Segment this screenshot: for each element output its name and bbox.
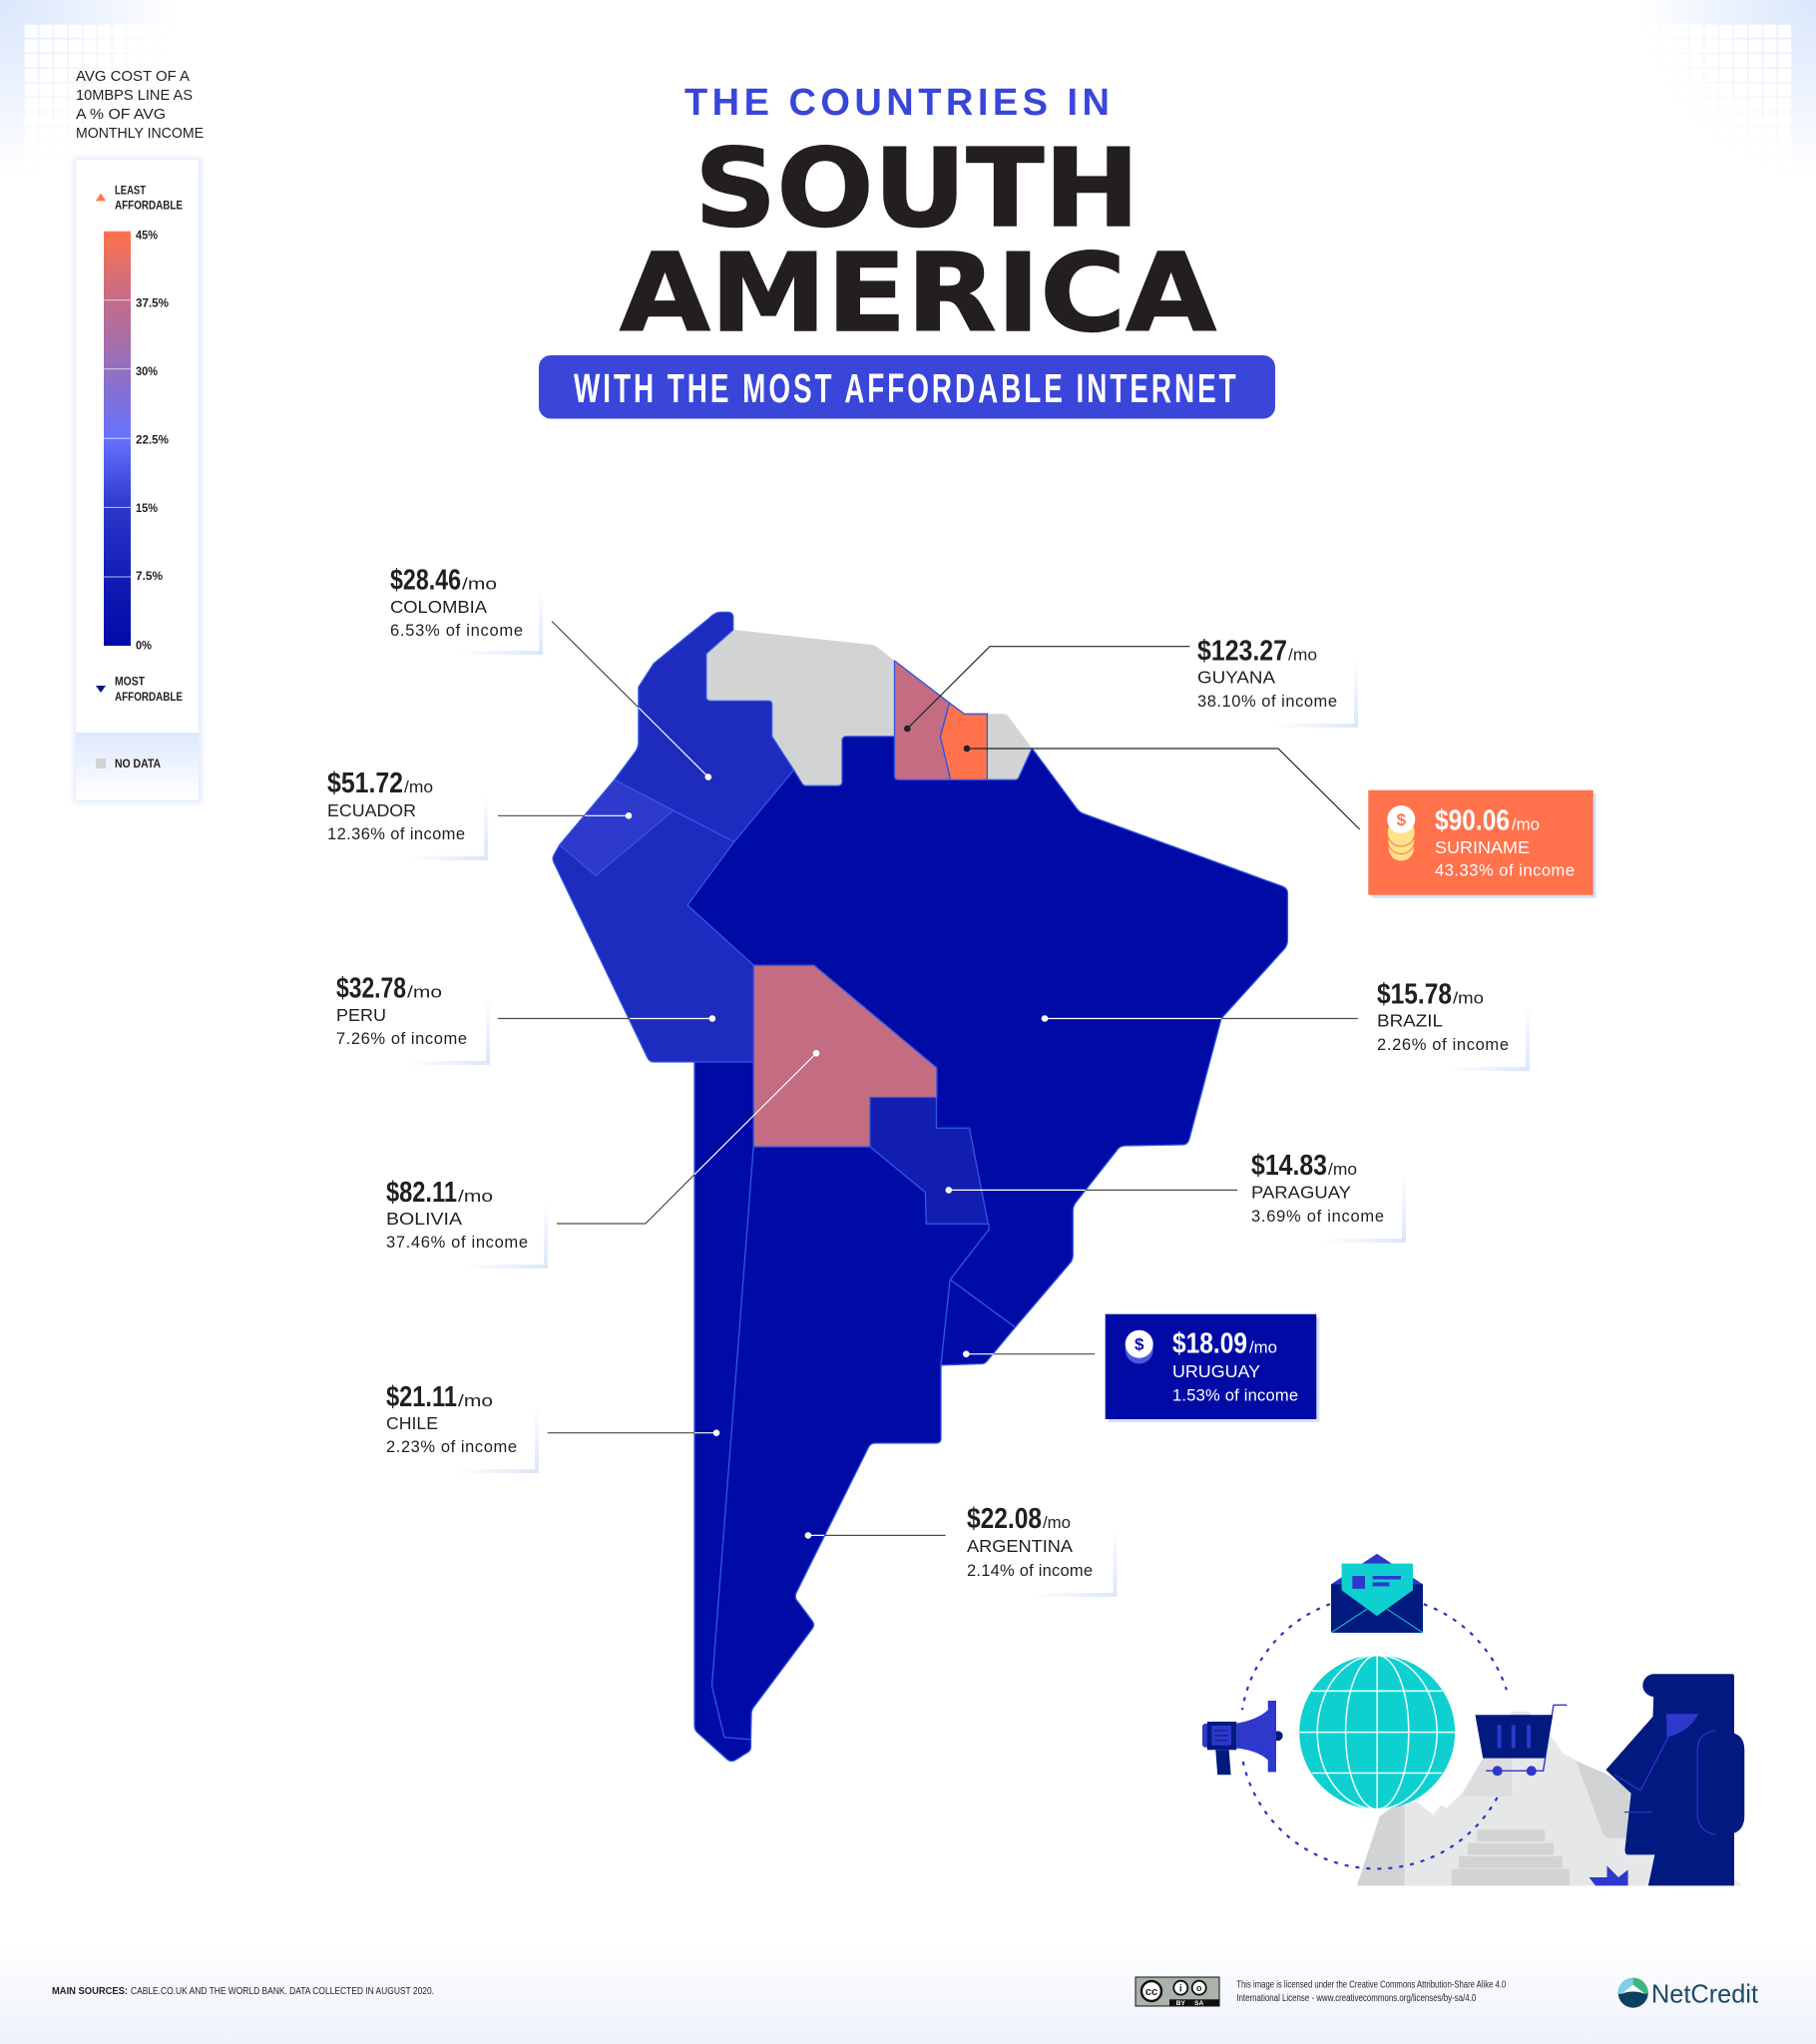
callout: Bolivia: $82.11 [386, 1177, 457, 1209]
Suriname [940, 703, 987, 779]
callout: Colombia [390, 565, 543, 655]
logo: NetCredit: NetCredit [1651, 1979, 1759, 2009]
callout: Brazil: BRAZIL [1377, 1011, 1443, 1031]
icon: creative commons badge: SA [1194, 2000, 1204, 2007]
subtitle: WITH THE MOST AFFORDABLE INTERNET [574, 366, 1236, 411]
callout: Peru [336, 972, 490, 1065]
callout: Peru: 7.26% of income [336, 1030, 467, 1048]
icon: globe [1299, 1655, 1455, 1809]
icon: creative commons badge: o [1196, 1983, 1202, 1993]
subtitle band [539, 355, 1275, 419]
callout: Argentina: ARGENTINA [967, 1536, 1073, 1556]
scale labels [136, 230, 169, 653]
Colombia [615, 612, 794, 841]
scale labels: 37.5% [136, 297, 169, 309]
callout: Colombia: 6.53% of income [390, 622, 523, 640]
callout: Uruguay (most affordable): $18.09 [1172, 1328, 1247, 1360]
Guyana [894, 661, 951, 779]
callout: Chile: $21.11 [386, 1381, 457, 1413]
callout: Bolivia [386, 1177, 548, 1269]
Bolivia [753, 965, 937, 1147]
callout: Peru: PERU [336, 1005, 386, 1025]
license text: This image is licensed under the Creative Commons Attribution-Share Alike 4.0 [1236, 1980, 1507, 1991]
icon: creative commons badge: i [1179, 1984, 1182, 1994]
callout: Bolivia: 37.46% of income [386, 1234, 528, 1252]
callout: Ecuador: ECUADOR [327, 800, 416, 820]
Argentina [712, 1147, 989, 1740]
least affordable label: AFFORDABLE [115, 201, 183, 213]
callout: Colombia: COLOMBIA [390, 597, 487, 617]
icon: coin: $ [1135, 1335, 1144, 1354]
background corner: top right [1636, 0, 1816, 180]
legend heading: MONTHLY INCOME [76, 126, 204, 142]
scale labels: 30% [136, 366, 158, 378]
callout: Chile: 2.23% of income [386, 1438, 517, 1456]
callout: Ecuador: 12.36% of income [327, 825, 465, 843]
Paraguay [870, 1098, 988, 1224]
most affordable label: MOST [115, 677, 145, 689]
Peru [553, 810, 753, 1062]
callout: Suriname (least affordable): /mo [1512, 814, 1540, 834]
callout: Guyana: $123.27 [1197, 635, 1287, 667]
icon: coin [1126, 1330, 1153, 1363]
least affordable label [115, 186, 183, 213]
icon: creative commons badge [1135, 1977, 1219, 2007]
Uruguay [941, 1279, 1015, 1365]
mountain [1357, 1712, 1742, 1885]
callout: Paraguay: PARAGUAY [1251, 1182, 1351, 1202]
panel: legend [74, 158, 202, 803]
callout: Chile: /mo [458, 1391, 493, 1410]
callout: Suriname (least affordable): SURINAME [1435, 837, 1530, 857]
callout: Guyana: /mo [1288, 645, 1317, 665]
scale labels: 7.5% [136, 571, 163, 583]
scale labels: 22.5% [136, 435, 169, 447]
callout: Guyana [1197, 635, 1358, 728]
least affordable label: LEAST [115, 186, 146, 198]
sources: CABLE.CO.UK AND THE WORLD BANK. DATA COLLECTED IN AUGUST 2020. [131, 1985, 434, 1997]
callout: Suriname (least affordable): $90.06 [1435, 804, 1510, 836]
icon: envelope [1331, 1554, 1423, 1633]
heading line 1: SOUTH [694, 127, 1139, 252]
callout: Chile: CHILE [386, 1413, 438, 1433]
icon: megaphone [1202, 1701, 1283, 1775]
callout: Argentina: /mo [1043, 1513, 1071, 1532]
no data label: NO DATA [115, 759, 161, 770]
callout: Uruguay (most affordable): /mo [1249, 1338, 1277, 1357]
heading line 2: AMERICA [620, 232, 1216, 356]
callout: Peru: /mo [407, 982, 442, 1001]
callout: Guyana: 38.10% of income [1197, 693, 1337, 711]
callout: Uruguay (most affordable): 1.53% of income [1172, 1386, 1298, 1404]
callout: Argentina: 2.14% of income [967, 1562, 1093, 1580]
legend heading: A % OF AVG [76, 107, 166, 123]
sources [52, 1985, 434, 1997]
scale labels: 15% [136, 503, 158, 515]
logo mark [1618, 1978, 1648, 2008]
leader dots [626, 726, 1048, 1539]
icon: crown plant [1589, 1865, 1628, 1885]
callout: Paraguay [1251, 1150, 1406, 1243]
callout: Bolivia: /mo [458, 1187, 493, 1206]
callout: Suriname (least affordable): 43.33% of income [1435, 861, 1575, 879]
license text [1236, 1980, 1507, 2004]
icon: creative commons badge: cc [1145, 1986, 1157, 1998]
most affordable label [115, 677, 183, 704]
Chile [694, 1062, 753, 1762]
callout: Peru: $32.78 [336, 972, 406, 1004]
leader lines [498, 621, 1360, 1535]
French Guiana (no data) [987, 714, 1032, 779]
callout: Brazil: 2.26% of income [1377, 1036, 1509, 1054]
callout: Brazil [1377, 978, 1530, 1071]
callout: Colombia: /mo [462, 575, 497, 593]
legend heading: 10MBPS LINE AS [76, 88, 193, 104]
callout: Brazil: $15.78 [1377, 978, 1452, 1010]
illustration: internet and Machu Picchu with moai [1202, 1554, 1744, 1885]
no data swatch [96, 759, 106, 768]
title block [539, 82, 1275, 419]
callout: Brazil: /mo [1453, 988, 1484, 1008]
scale labels: 0% [136, 641, 152, 653]
icon: most affordable arrow [96, 686, 106, 693]
callout: Bolivia: BOLIVIA [386, 1209, 462, 1229]
callout: Chile [386, 1381, 539, 1473]
callout: Colombia: $28.46 [390, 565, 461, 597]
callout: Argentina [967, 1503, 1118, 1597]
map of South America [553, 612, 1287, 1762]
legend heading [76, 69, 204, 142]
callout: Ecuador: /mo [404, 777, 433, 796]
icon: moai head [1605, 1674, 1744, 1885]
license text: International License - www.creativecommons.org/licenses/by-sa/4.0 [1236, 1993, 1477, 2004]
scale labels: 45% [136, 230, 158, 242]
callout: Uruguay (most affordable) [1106, 1314, 1319, 1422]
callout: Paraguay: /mo [1328, 1160, 1357, 1179]
footer background [0, 1941, 1816, 2044]
legend heading: AVG COST OF A [76, 69, 190, 85]
Brazil [687, 737, 1287, 1327]
icon: coin stack: $ [1397, 810, 1407, 829]
icon: shopping cart [1475, 1705, 1567, 1776]
callout: Paraguay: $14.83 [1251, 1150, 1327, 1182]
kicker: THE COUNTRIES IN [684, 82, 1110, 124]
icon: creative commons badge: BY [1176, 2000, 1185, 2007]
callout: Uruguay (most affordable): URUGUAY [1172, 1361, 1260, 1381]
callout: Ecuador [327, 767, 488, 860]
callout: Argentina: $22.08 [967, 1503, 1042, 1535]
callout: Ecuador: $51.72 [327, 767, 403, 799]
icon: coin stack [1387, 805, 1415, 861]
colour scale [104, 232, 131, 646]
sources: MAIN SOURCES: [52, 1985, 128, 1997]
callout: Guyana: GUYANA [1197, 667, 1275, 687]
callout: Suriname (least affordable) [1368, 790, 1596, 898]
dashed orbit [1242, 1604, 1507, 1868]
background corner: top left [0, 0, 180, 180]
callout: Paraguay: 3.69% of income [1251, 1208, 1384, 1226]
most affordable label: AFFORDABLE [115, 692, 183, 704]
Venezuela (no data) [706, 630, 894, 785]
Ecuador [560, 779, 674, 875]
icon: least affordable arrow [96, 194, 106, 201]
